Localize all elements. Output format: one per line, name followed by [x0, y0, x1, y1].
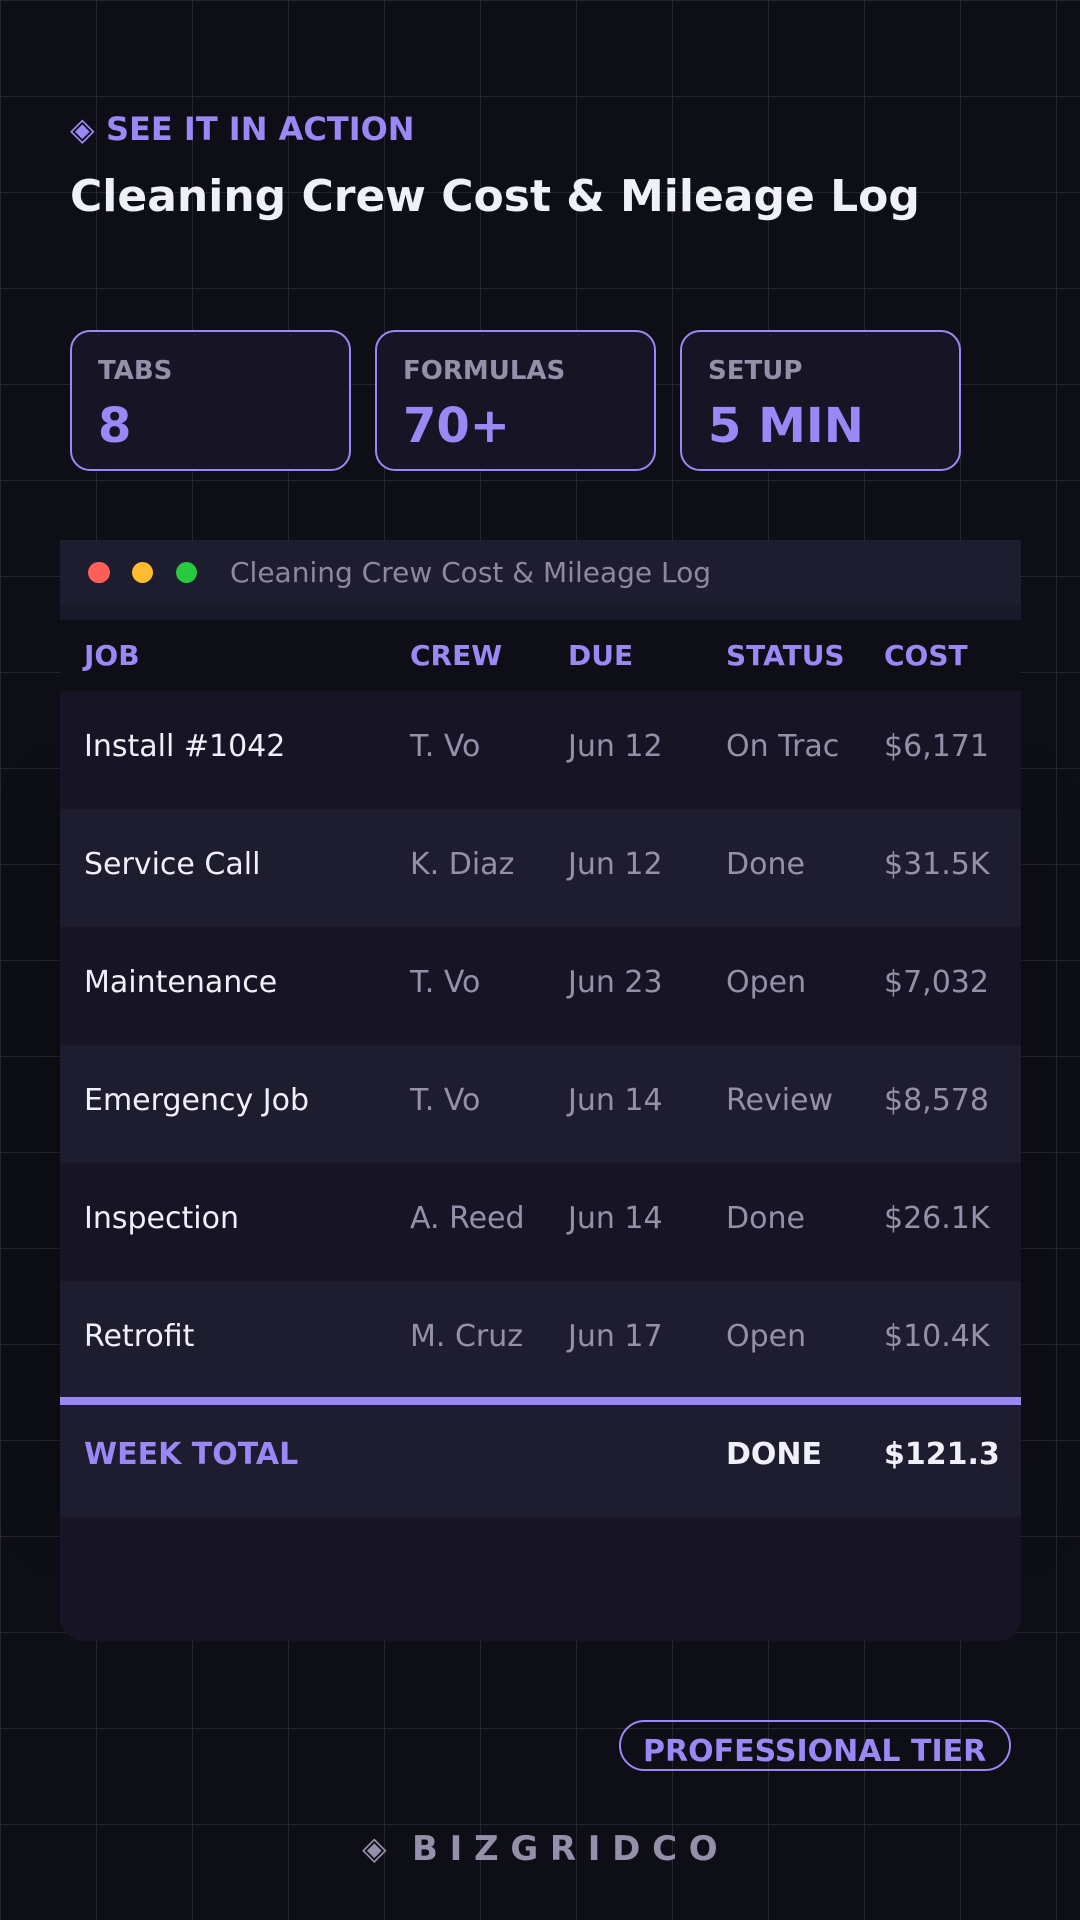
- row: emergency job: Review: [726, 1083, 833, 1118]
- row: retrofit: M. Cruz: [410, 1319, 523, 1354]
- icon: footer diamond: ◈: [362, 1829, 387, 1867]
- icon: diamond: ◈: [70, 110, 95, 148]
- stat card: setup: [680, 330, 961, 471]
- row: retrofit: Open: [726, 1319, 806, 1354]
- tier badge: PROFESSIONAL TIER: [643, 1734, 986, 1769]
- stat card: setup: SETUP: [708, 356, 802, 386]
- row: inspection: $26.1K: [884, 1201, 990, 1236]
- panel: spreadsheet window: [60, 540, 1021, 1641]
- table header: STATUS: [726, 639, 845, 672]
- row: install: Install #1042: [84, 729, 285, 764]
- stat card: formulas: [375, 330, 656, 471]
- row: emergency job: Jun 14: [568, 1083, 663, 1118]
- row: service call: K. Diaz: [410, 847, 514, 882]
- row: maintenance: $7,032: [884, 965, 989, 1000]
- icon: green dot: [176, 562, 197, 583]
- table header: COST: [884, 639, 968, 672]
- row: emergency job: [60, 1045, 1021, 1163]
- row: service call: [60, 809, 1021, 927]
- stat card: tabs: 8: [98, 398, 131, 454]
- total row: [60, 1397, 1021, 1517]
- row: maintenance: [60, 927, 1021, 1045]
- row: install: [60, 691, 1021, 809]
- footer brand: [362, 1829, 729, 1869]
- row: install: T. Vo: [410, 729, 480, 764]
- title bar underside band: [60, 605, 1021, 620]
- row: retrofit: $10.4K: [884, 1319, 990, 1354]
- table header: [60, 620, 1021, 691]
- title: Cleaning Crew Cost & Mileage Log: [70, 171, 920, 222]
- window title: Cleaning Crew Cost & Mileage Log: [230, 556, 711, 589]
- row: retrofit: [60, 1281, 1021, 1399]
- stat card: tabs: [70, 330, 351, 471]
- row: service call: Done: [726, 847, 805, 882]
- row: inspection: Done: [726, 1201, 805, 1236]
- stat card: formulas: FORMULAS: [403, 356, 565, 386]
- row: inspection: A. Reed: [410, 1201, 525, 1236]
- row: maintenance: Jun 23: [568, 965, 663, 1000]
- row: maintenance: Open: [726, 965, 806, 1000]
- row: service call: Jun 12: [568, 847, 663, 882]
- row: retrofit: Jun 17: [568, 1319, 663, 1354]
- row: retrofit: Retrofit: [84, 1319, 194, 1354]
- stat card: formulas: 70+: [403, 398, 510, 454]
- row: emergency job: $8,578: [884, 1083, 989, 1118]
- total row: DONE: [726, 1437, 822, 1472]
- total row: $121.3: [884, 1437, 1000, 1472]
- icon: yellow dot: [132, 562, 153, 583]
- row: service call: Service Call: [84, 847, 260, 882]
- tier badge: [619, 1720, 1011, 1771]
- row: service call: $31.5K: [884, 847, 990, 882]
- row: install: $6,171: [884, 729, 989, 764]
- icon: red dot: [88, 562, 110, 583]
- eyebrow: [70, 110, 415, 148]
- table header: DUE: [568, 639, 633, 672]
- row: inspection: Jun 14: [568, 1201, 663, 1236]
- row: maintenance: T. Vo: [410, 965, 480, 1000]
- row: inspection: Inspection: [84, 1201, 239, 1236]
- stat card: setup: 5 MIN: [708, 398, 864, 454]
- total row: WEEK TOTAL: [84, 1437, 298, 1472]
- row: emergency job: T. Vo: [410, 1083, 480, 1118]
- eyebrow text: SEE IT IN ACTION: [106, 110, 415, 148]
- table header: CREW: [410, 639, 502, 672]
- row: emergency job: Emergency Job: [84, 1083, 309, 1118]
- row: install: On Trac: [726, 729, 839, 764]
- window title bar: [60, 540, 1021, 605]
- stat card: tabs: TABS: [98, 356, 172, 386]
- table header: JOB: [84, 639, 140, 672]
- row: inspection: [60, 1163, 1021, 1281]
- brand name: BIZGRIDCO: [412, 1829, 729, 1869]
- row: install: Jun 12: [568, 729, 663, 764]
- row: maintenance: Maintenance: [84, 965, 277, 1000]
